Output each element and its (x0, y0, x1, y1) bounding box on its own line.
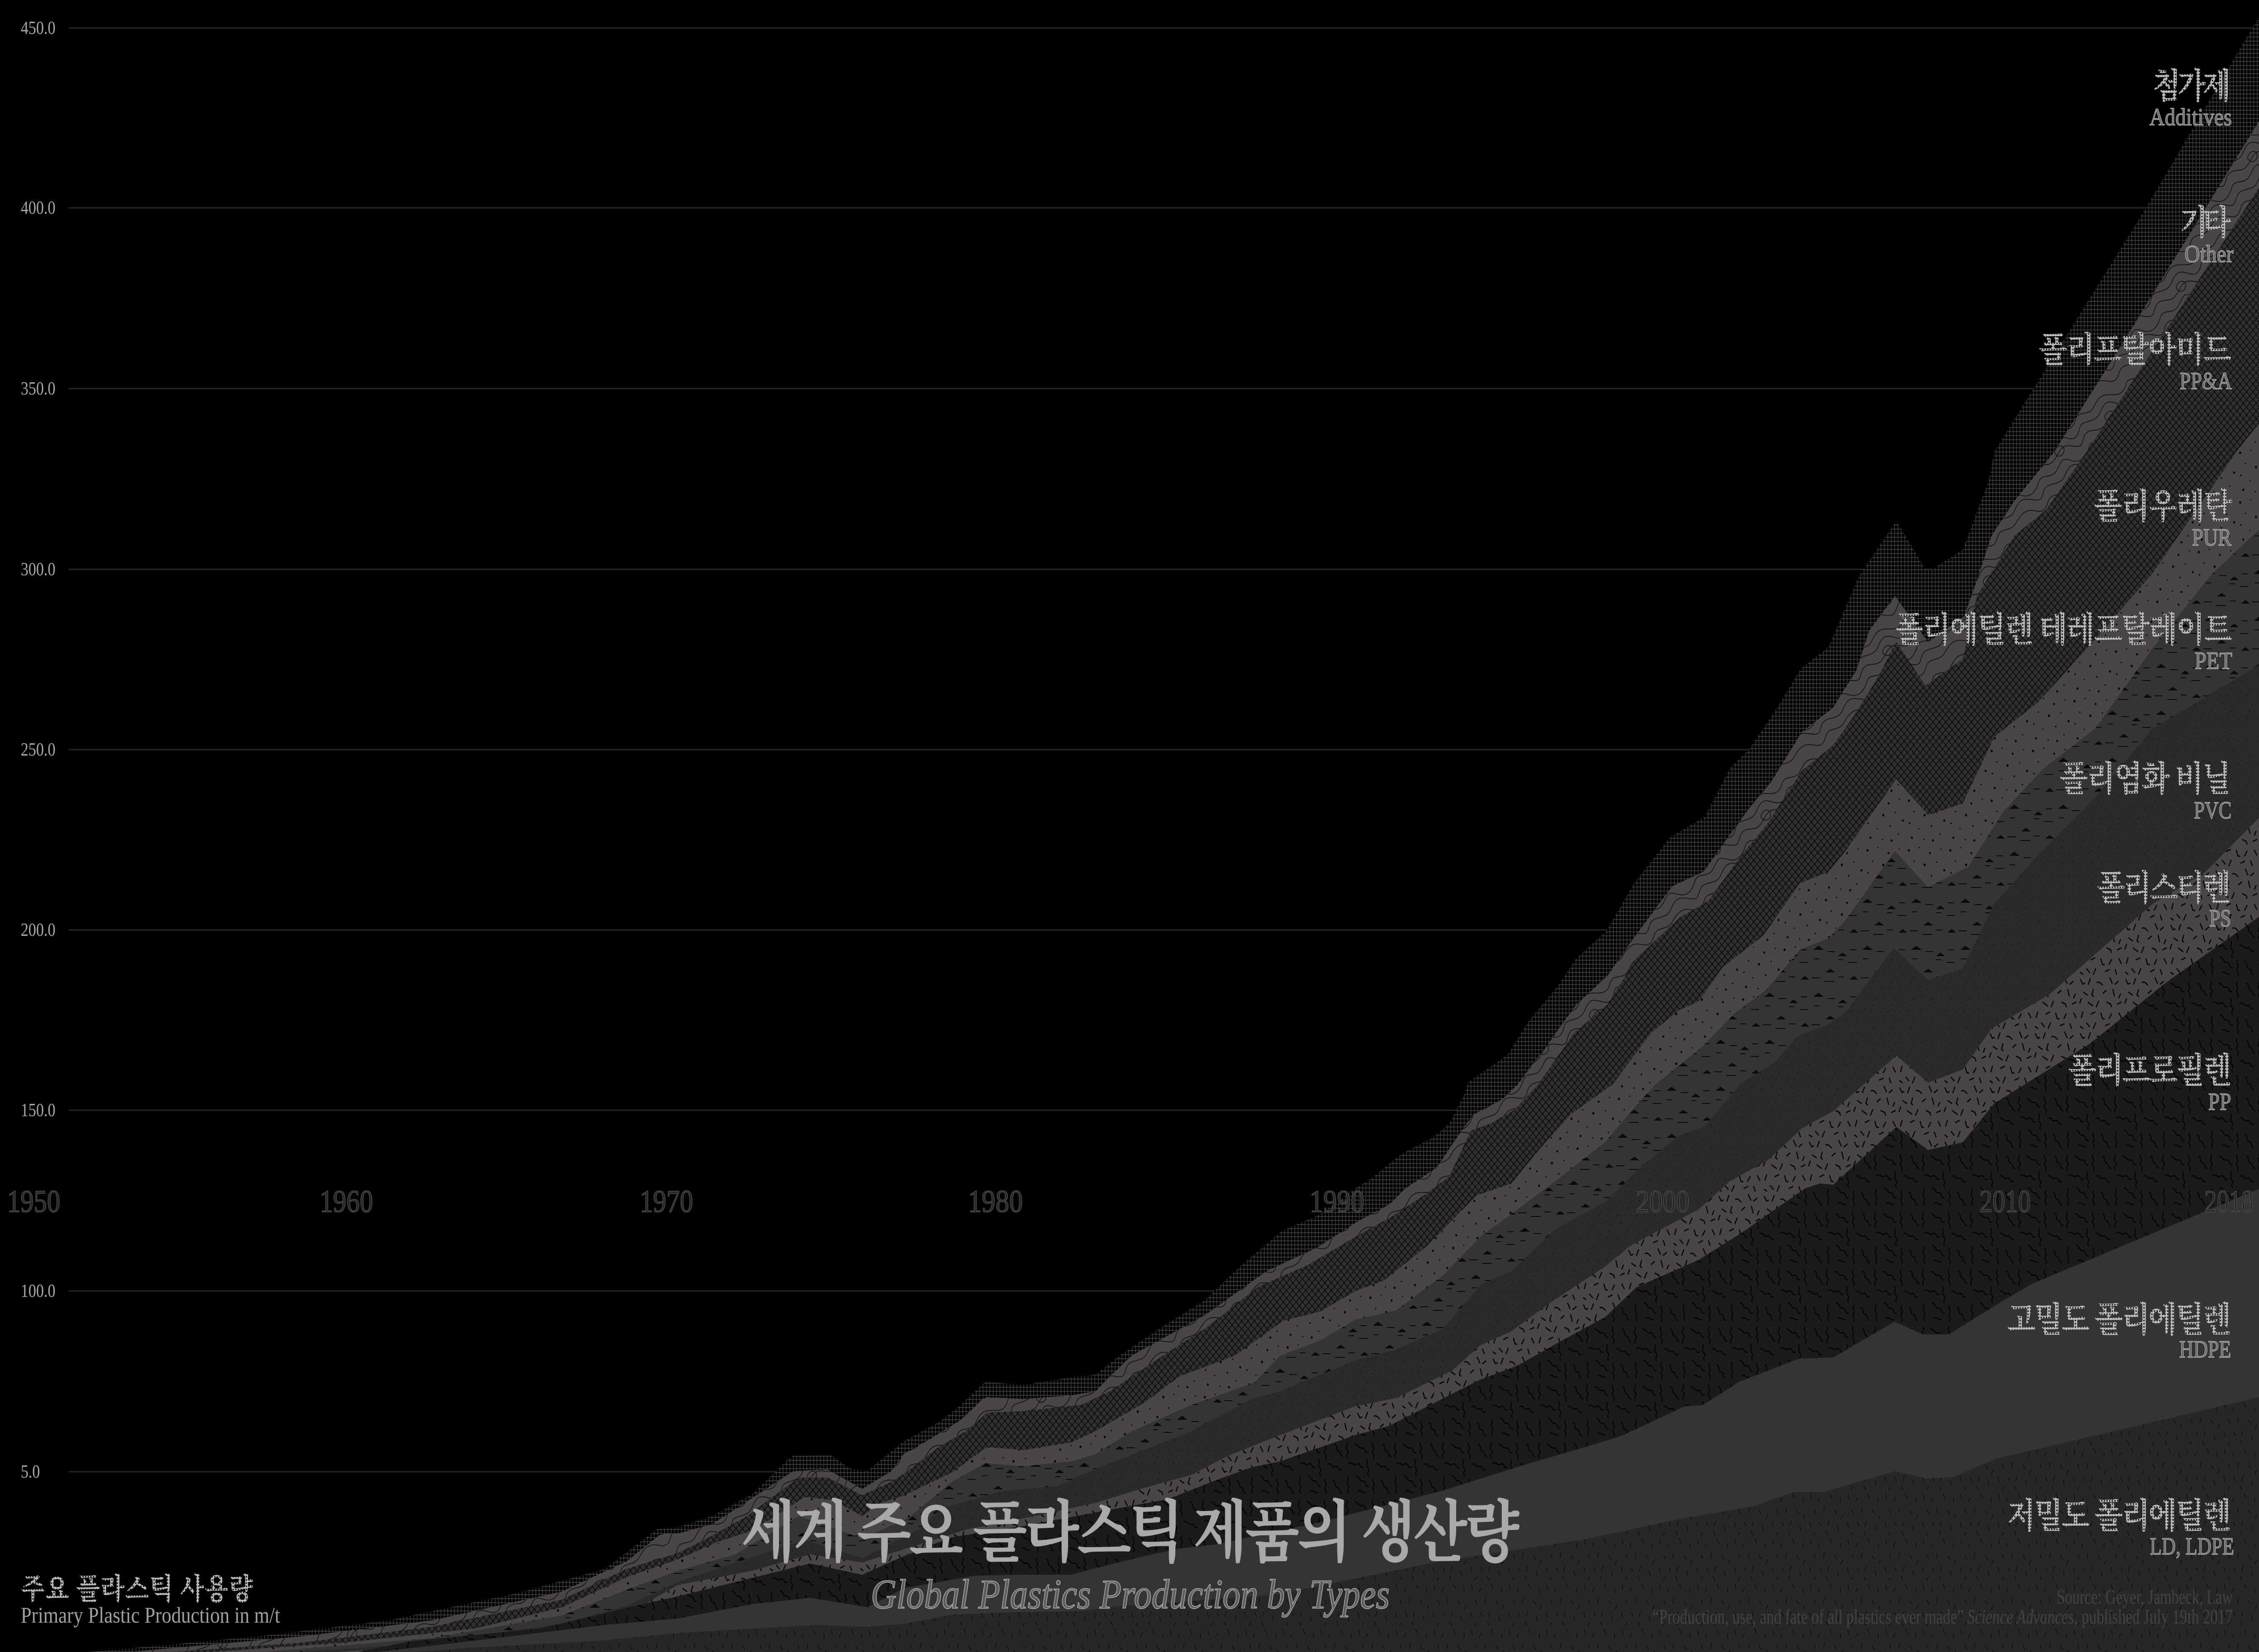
label: PUR: 폴리우레탄 (2094, 487, 2232, 526)
x-axis year labels: 2018 (2204, 1184, 2254, 1219)
label: PP: PP (2208, 1088, 2231, 1115)
subtitle: Global Plastics Production by Types (871, 1572, 1390, 1618)
label: additives (2150, 66, 2232, 131)
label: PET (1895, 610, 2232, 674)
axis title (21, 1573, 280, 1628)
label: PP: 폴리프로필렌 (2068, 1051, 2231, 1090)
label: PVC: PVC (2194, 797, 2231, 824)
y-axis labels: 150.0 (21, 1100, 56, 1121)
label: other: 기타 (2179, 203, 2231, 243)
source note: Source: Geyer, Jambeck, Law (2057, 1586, 2233, 1608)
axis title: Primary Plastic Production in m/t (21, 1602, 280, 1628)
area: HDPE (376, 1189, 2259, 1652)
y-axis labels: 200.0 (21, 920, 56, 940)
axis title: 주요 플라스틱 사용량 (21, 1573, 253, 1606)
label: LDPE (2007, 1496, 2234, 1560)
label: additives: Additives (2150, 103, 2232, 131)
y-axis labels: 250.0 (21, 739, 56, 760)
y-axis labels: 5.0 (21, 1461, 40, 1482)
label: HDPE (2007, 1300, 2231, 1363)
y-axis labels: 300.0 (21, 559, 56, 580)
label: PUR (2094, 487, 2232, 551)
y-axis labels: 100.0 (21, 1281, 56, 1301)
label: PS: PS (2209, 905, 2231, 932)
area: PP (358, 917, 2259, 1652)
area: PUR (211, 423, 2259, 1652)
title: 세계 주요 플라스틱 제품의 생산량 (741, 1495, 1520, 1571)
label: PS: 폴리스티렌 (2097, 868, 2231, 908)
label: PVC (2059, 759, 2231, 824)
series labels (1895, 66, 2234, 1560)
label: PP&A (2039, 330, 2232, 394)
x-axis year labels: 1950 (7, 1184, 60, 1219)
area: PS (339, 818, 2259, 1652)
y-axis labels: 400.0 (21, 197, 56, 218)
label: PET: 폴리에틸렌 테레프탈레이트 (1895, 610, 2232, 649)
x-axis year labels: 1970 (640, 1184, 693, 1219)
label: PP&A: PP&A (2179, 367, 2232, 394)
x-axis year labels: 1960 (320, 1184, 373, 1219)
source note: “Production, use, and fate of all plastics ever made” Science Advances, published July 19th 2017 (1653, 1605, 2233, 1628)
label: PVC: 폴리염화 비닐 (2059, 759, 2231, 798)
area: PET (263, 530, 2259, 1652)
label: PS (2097, 868, 2231, 932)
label: PET: PET (2195, 647, 2232, 674)
x-axis year labels (7, 1184, 2254, 1219)
y-axis labels (21, 18, 56, 1482)
x-axis year labels: 2010 (1980, 1184, 2031, 1219)
label: other (2179, 203, 2234, 268)
label: other: Other (2184, 240, 2234, 268)
area: LDPE (414, 1397, 2259, 1652)
y-axis labels: 450.0 (21, 18, 56, 38)
label: PP&A: 폴리프탈아미드 (2039, 330, 2231, 370)
area: PVC (301, 665, 2259, 1652)
source note (1653, 1586, 2233, 1628)
label: HDPE: HDPE (2179, 1336, 2231, 1363)
x-axis year labels: 2000 (1636, 1184, 1689, 1219)
label: LDPE: LD, LDPE (2150, 1533, 2234, 1560)
x-axis year labels: 1990 (1309, 1184, 1364, 1219)
label: additives: 첨가제 (2152, 66, 2231, 106)
y-axis labels: 350.0 (21, 378, 56, 399)
label: LDPE: 저밀도 폴리에틸렌 (2007, 1496, 2231, 1535)
x-axis year labels: 1980 (968, 1184, 1023, 1219)
label: HDPE: 고밀도 폴리에틸렌 (2007, 1300, 2231, 1339)
label: PP (2068, 1051, 2231, 1115)
label: PUR: PUR (2192, 524, 2232, 551)
